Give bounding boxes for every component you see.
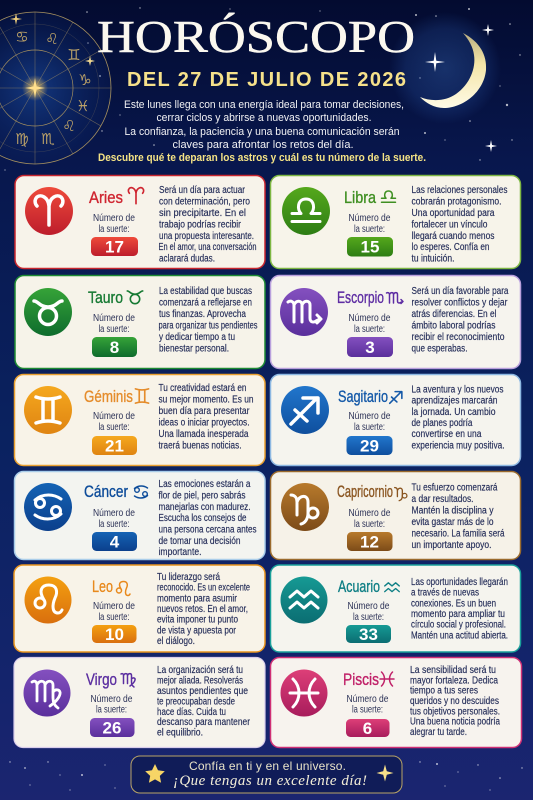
lucky number label <box>93 508 135 530</box>
icon: Sagitario <box>281 386 329 434</box>
icon: Cáncer <box>24 483 72 531</box>
lucky number label <box>93 601 135 623</box>
description: En el amor, una conversación <box>158 242 256 253</box>
lucky number label: Número de <box>348 601 390 612</box>
title: HORÓSCOPO <box>97 11 415 62</box>
description: tu intuición. <box>412 254 454 264</box>
lucky number: 21: 21 <box>105 436 124 456</box>
description: mayor fortaleza. Dedica <box>410 675 498 686</box>
description <box>412 185 508 264</box>
lucky number: 12 <box>347 532 392 552</box>
description: resolver conflictos y dejar <box>412 298 508 308</box>
description: momento para asumir <box>157 593 238 604</box>
intro text: Descubre qué te deparan los astros y cuál es tu número de la suerte. <box>98 152 426 164</box>
lucky number label <box>348 411 391 433</box>
description <box>412 384 504 451</box>
description: Las oportunidades llegarán <box>411 577 508 588</box>
intro text: cerrar ciclos y abrirse a nuevas oportunidades. <box>156 112 372 124</box>
lucky number: 4: 4 <box>110 532 120 552</box>
name: Cáncer: Cáncer <box>84 482 128 501</box>
name: Piscis: Piscis <box>343 670 379 689</box>
description: mejor aliada. Resolverás <box>157 675 243 686</box>
intro text: claves para afrontar los retos del día. <box>172 139 354 151</box>
lucky number label <box>346 694 389 716</box>
lucky number label: Número de <box>93 411 135 422</box>
lucky number: 15: 15 <box>361 238 379 256</box>
description: tus objetivos personales. <box>410 706 500 717</box>
description: de vista y apuesta por <box>157 625 237 636</box>
description <box>158 383 254 452</box>
lucky number label: la suerte: <box>98 224 130 235</box>
lucky number label <box>93 411 135 433</box>
lucky number: 6 <box>346 719 390 738</box>
description: asuntos pendientes que <box>157 686 248 697</box>
intro text <box>98 99 426 164</box>
lucky number: 33 <box>346 625 391 644</box>
icon: Virgo <box>24 670 70 716</box>
panel: Aries <box>15 176 265 268</box>
name: Virgo: Virgo <box>86 670 117 689</box>
name: Aries <box>89 188 144 207</box>
description: experiencia muy positiva. <box>412 440 504 451</box>
panel: Escorpio <box>270 276 520 368</box>
description: descanso para mantener <box>157 717 251 728</box>
icon: Leo <box>24 576 72 624</box>
panel: Cáncer <box>14 472 265 560</box>
description: La organización será tu <box>157 665 243 676</box>
icon: crescent moon <box>389 12 501 124</box>
description: el equilibrio. <box>157 728 203 739</box>
description: Una llamada inesperada <box>158 429 249 440</box>
description <box>411 577 508 641</box>
description: un importante apoyo. <box>412 540 492 551</box>
intro text: Este lunes llega con una energía ideal para tomar decisiones, <box>124 99 404 111</box>
description: La sensibilidad será tu <box>410 665 496 676</box>
icon: zodiac wheel <box>0 12 111 164</box>
description <box>158 479 256 558</box>
description: aclarará dudas. <box>159 254 215 264</box>
lucky number: 26: 26 <box>103 718 121 738</box>
lucky number label: la suerte: <box>98 422 130 433</box>
description: tus finanzas. Aprovecha <box>159 309 246 320</box>
lucky number label: Número de <box>348 508 391 519</box>
description: Una buena noticia podría <box>410 717 500 728</box>
name: Sagitario: Sagitario <box>338 387 388 406</box>
lucky number label: la suerte: <box>352 704 383 716</box>
panel: Virgo <box>14 658 265 748</box>
icon: sparkles <box>425 24 497 152</box>
icon: Géminis <box>24 386 72 434</box>
icon: Libra <box>282 187 330 235</box>
description: La aventura y los nuevos <box>412 384 504 395</box>
description <box>158 286 258 354</box>
footer closing line: ¡Que tengas un excelente día! <box>173 773 367 789</box>
description: una persona cercana antes <box>158 524 256 536</box>
description: tiempo a tus seres <box>410 686 478 697</box>
lucky number label: Número de <box>93 313 135 324</box>
description: una propuesta interesante. <box>159 231 254 242</box>
lucky number label: la suerte: <box>353 612 384 623</box>
lucky number label: Número de <box>90 694 133 705</box>
description: de planes podría <box>412 418 473 429</box>
lucky number label <box>93 213 135 235</box>
footer banner <box>131 756 402 793</box>
lucky number: 6: 6 <box>363 719 372 738</box>
lucky number label <box>90 694 133 716</box>
description: ámbito laboral podrías <box>412 320 496 332</box>
lucky number label: Número de <box>93 508 135 519</box>
lucky number: 29 <box>346 436 392 456</box>
description: evita gastar más de lo <box>412 517 494 528</box>
description: La estabilidad que buscas <box>159 286 252 297</box>
description: de tomar una decisión <box>158 536 240 547</box>
description <box>412 286 509 354</box>
lucky number label: la suerte: <box>354 324 385 335</box>
description: nuevos retos. En el amor, <box>157 604 248 615</box>
panel: Acuario <box>270 565 520 652</box>
description: Será un día para actuar <box>159 185 246 196</box>
icon: Escorpio <box>280 288 328 336</box>
lucky number: 17: 17 <box>105 238 124 256</box>
lucky number label: la suerte: <box>98 324 130 335</box>
lucky number label: Número de <box>348 411 391 422</box>
description: lo esperes. Confía en <box>412 242 490 253</box>
description: buen día para presentar <box>158 406 250 417</box>
icon: Piscis <box>280 670 328 716</box>
icon: zodiac wheel: ♑︎ <box>78 71 92 89</box>
panel: Sagitario <box>270 374 520 466</box>
description: reconocido. Es un excelente <box>157 583 250 594</box>
lucky number label <box>348 601 390 623</box>
description: a través de nuevas <box>411 588 479 599</box>
lucky number: 17 <box>91 237 138 256</box>
description: cobrarán protagonismo. <box>412 196 502 208</box>
description: Las emociones estarán a <box>158 479 251 490</box>
lucky number: 15 <box>347 237 393 256</box>
description <box>158 185 256 264</box>
description: traerá buenas noticias. <box>158 440 242 452</box>
intro text: La confianza, la paciencia y una buena comunicación serán <box>124 126 400 138</box>
lucky number: 8 <box>92 337 137 357</box>
lucky number label <box>348 313 391 335</box>
description: Tu esfuerzo comenzará <box>412 483 498 494</box>
name: Libra: Libra <box>344 188 376 207</box>
description: la jornada. Un cambio <box>412 407 496 418</box>
lucky number: 21 <box>92 436 137 456</box>
description: para organizar tus pendientes <box>158 320 258 332</box>
icon: Acuario <box>280 576 328 624</box>
footer message: Confía en ti y en el universo. <box>189 759 346 773</box>
lucky number: 10 <box>92 625 136 644</box>
lucky number label <box>348 508 391 530</box>
description <box>412 483 505 551</box>
description: te preocupaban desde <box>157 696 235 707</box>
description: momento para ampliar tu <box>411 609 505 620</box>
icon: zodiac wheel: ♋︎ <box>15 28 29 46</box>
icon: zodiac wheel: ♏︎ <box>41 130 55 148</box>
icon: Capricornio <box>281 483 329 531</box>
lucky number label: Número de <box>93 213 135 224</box>
icon: zodiac wheel: ♓︎ <box>76 97 90 115</box>
icon: zodiac wheel: ♊︎ <box>67 46 81 64</box>
description <box>157 665 251 739</box>
description: aprendizajes marcarán <box>412 396 498 406</box>
description: queridos y no descuides <box>410 696 499 707</box>
panel: Leo <box>14 565 265 652</box>
icon: zodiac wheel: ♌︎ <box>62 117 76 135</box>
lucky number: 12: 12 <box>360 532 379 552</box>
name: Escorpio: Escorpio <box>337 288 384 307</box>
name: Tauro: Tauro <box>88 288 123 307</box>
description: ideas o iniciar proyectos. <box>158 418 250 428</box>
subtitle: date: DEL 27 DE JULIO DE 2026 <box>127 69 406 91</box>
description: su mejor momento. Es un <box>158 394 254 406</box>
lucky number label: Número de <box>346 694 389 705</box>
description: evita imponer tu punto <box>157 615 238 626</box>
lucky number: 4 <box>92 532 137 552</box>
name: Capricornio: Capricornio <box>337 482 393 501</box>
icon: Aries <box>25 187 73 235</box>
description: importante. <box>158 547 202 558</box>
description: a dar resultados. <box>412 494 474 505</box>
lucky number: 8: 8 <box>110 338 119 357</box>
panel: Libra <box>270 176 520 268</box>
panel: Piscis <box>270 658 522 748</box>
name: Aries: Aries <box>89 188 123 207</box>
lucky number: 10: 10 <box>105 625 124 644</box>
description: necesario. La familia será <box>412 528 505 540</box>
description: Mantén una actitud abierta. <box>411 630 508 641</box>
lucky number label: la suerte: <box>96 704 127 716</box>
lucky number: 3 <box>347 337 393 357</box>
description: recibir el reconocimiento <box>412 332 505 343</box>
lucky number: 26 <box>90 718 134 738</box>
lucky number label <box>93 313 135 335</box>
description: sin precipitarte. En el <box>159 208 246 219</box>
description: Será un día favorable para <box>412 286 509 297</box>
description: comenzará a reflejarse en <box>159 298 252 308</box>
lucky number label: Número de <box>93 601 135 612</box>
description: llegará cuando menos <box>412 231 494 242</box>
name: Géminis: Géminis <box>84 387 133 406</box>
description <box>157 572 250 647</box>
lucky number label: la suerte: <box>354 519 385 530</box>
lucky number label: Número de <box>348 313 391 324</box>
description: y dedicar tiempo a tu <box>159 332 235 343</box>
description: Escucha los consejos de <box>158 513 247 524</box>
lucky number label: la suerte: <box>354 224 385 235</box>
panel: Tauro <box>15 276 265 368</box>
description: el diálogo. <box>157 636 195 647</box>
description: bienestar personal. <box>159 344 229 354</box>
description: Tu creatividad estará en <box>158 383 246 394</box>
description: flor de piel, pero sabrás <box>158 490 246 502</box>
description: Las relaciones personales <box>412 185 508 196</box>
icon: zodiac wheel: ♍︎ <box>15 130 29 148</box>
description: manejarlas con madurez. <box>158 502 250 513</box>
description: Mantén la disciplina y <box>412 506 494 516</box>
description: hace días. Cuida tu <box>157 707 226 718</box>
description: círculo social y profesional. <box>411 620 506 631</box>
description: Una oportunidad para <box>412 208 495 219</box>
description: trabajo podrías recibir <box>159 220 242 230</box>
description: Tu liderazgo será <box>157 572 220 583</box>
panel: Géminis <box>14 374 265 466</box>
description: fortalecer un vínculo <box>412 220 488 230</box>
description: conexiones. Es un buen <box>411 598 496 609</box>
lucky number: 3: 3 <box>365 338 375 357</box>
lucky number: 33: 33 <box>359 625 378 644</box>
icon: zodiac wheel: ♌︎ <box>45 30 59 48</box>
lucky number label <box>348 213 391 235</box>
description: que esperabas. <box>412 344 468 354</box>
icon: Tauro <box>24 288 72 336</box>
lucky number label: Número de <box>348 213 391 224</box>
description: convertirse en una <box>412 429 482 440</box>
name: Acuario: Acuario <box>338 577 380 596</box>
description: atrás diferencias. En el <box>412 309 496 320</box>
lucky number label: la suerte: <box>98 612 130 623</box>
name: Leo: Leo <box>92 577 113 596</box>
icon: sparkle <box>376 764 394 782</box>
description: con determinación, pero <box>159 196 250 208</box>
icon: star <box>145 764 165 783</box>
lucky number label: la suerte: <box>98 519 130 530</box>
description <box>410 665 500 738</box>
panel: Capricornio <box>270 472 520 560</box>
lucky number label: la suerte: <box>354 422 385 433</box>
description: alegrar tu tarde. <box>410 727 467 738</box>
lucky number: 29: 29 <box>360 436 379 456</box>
